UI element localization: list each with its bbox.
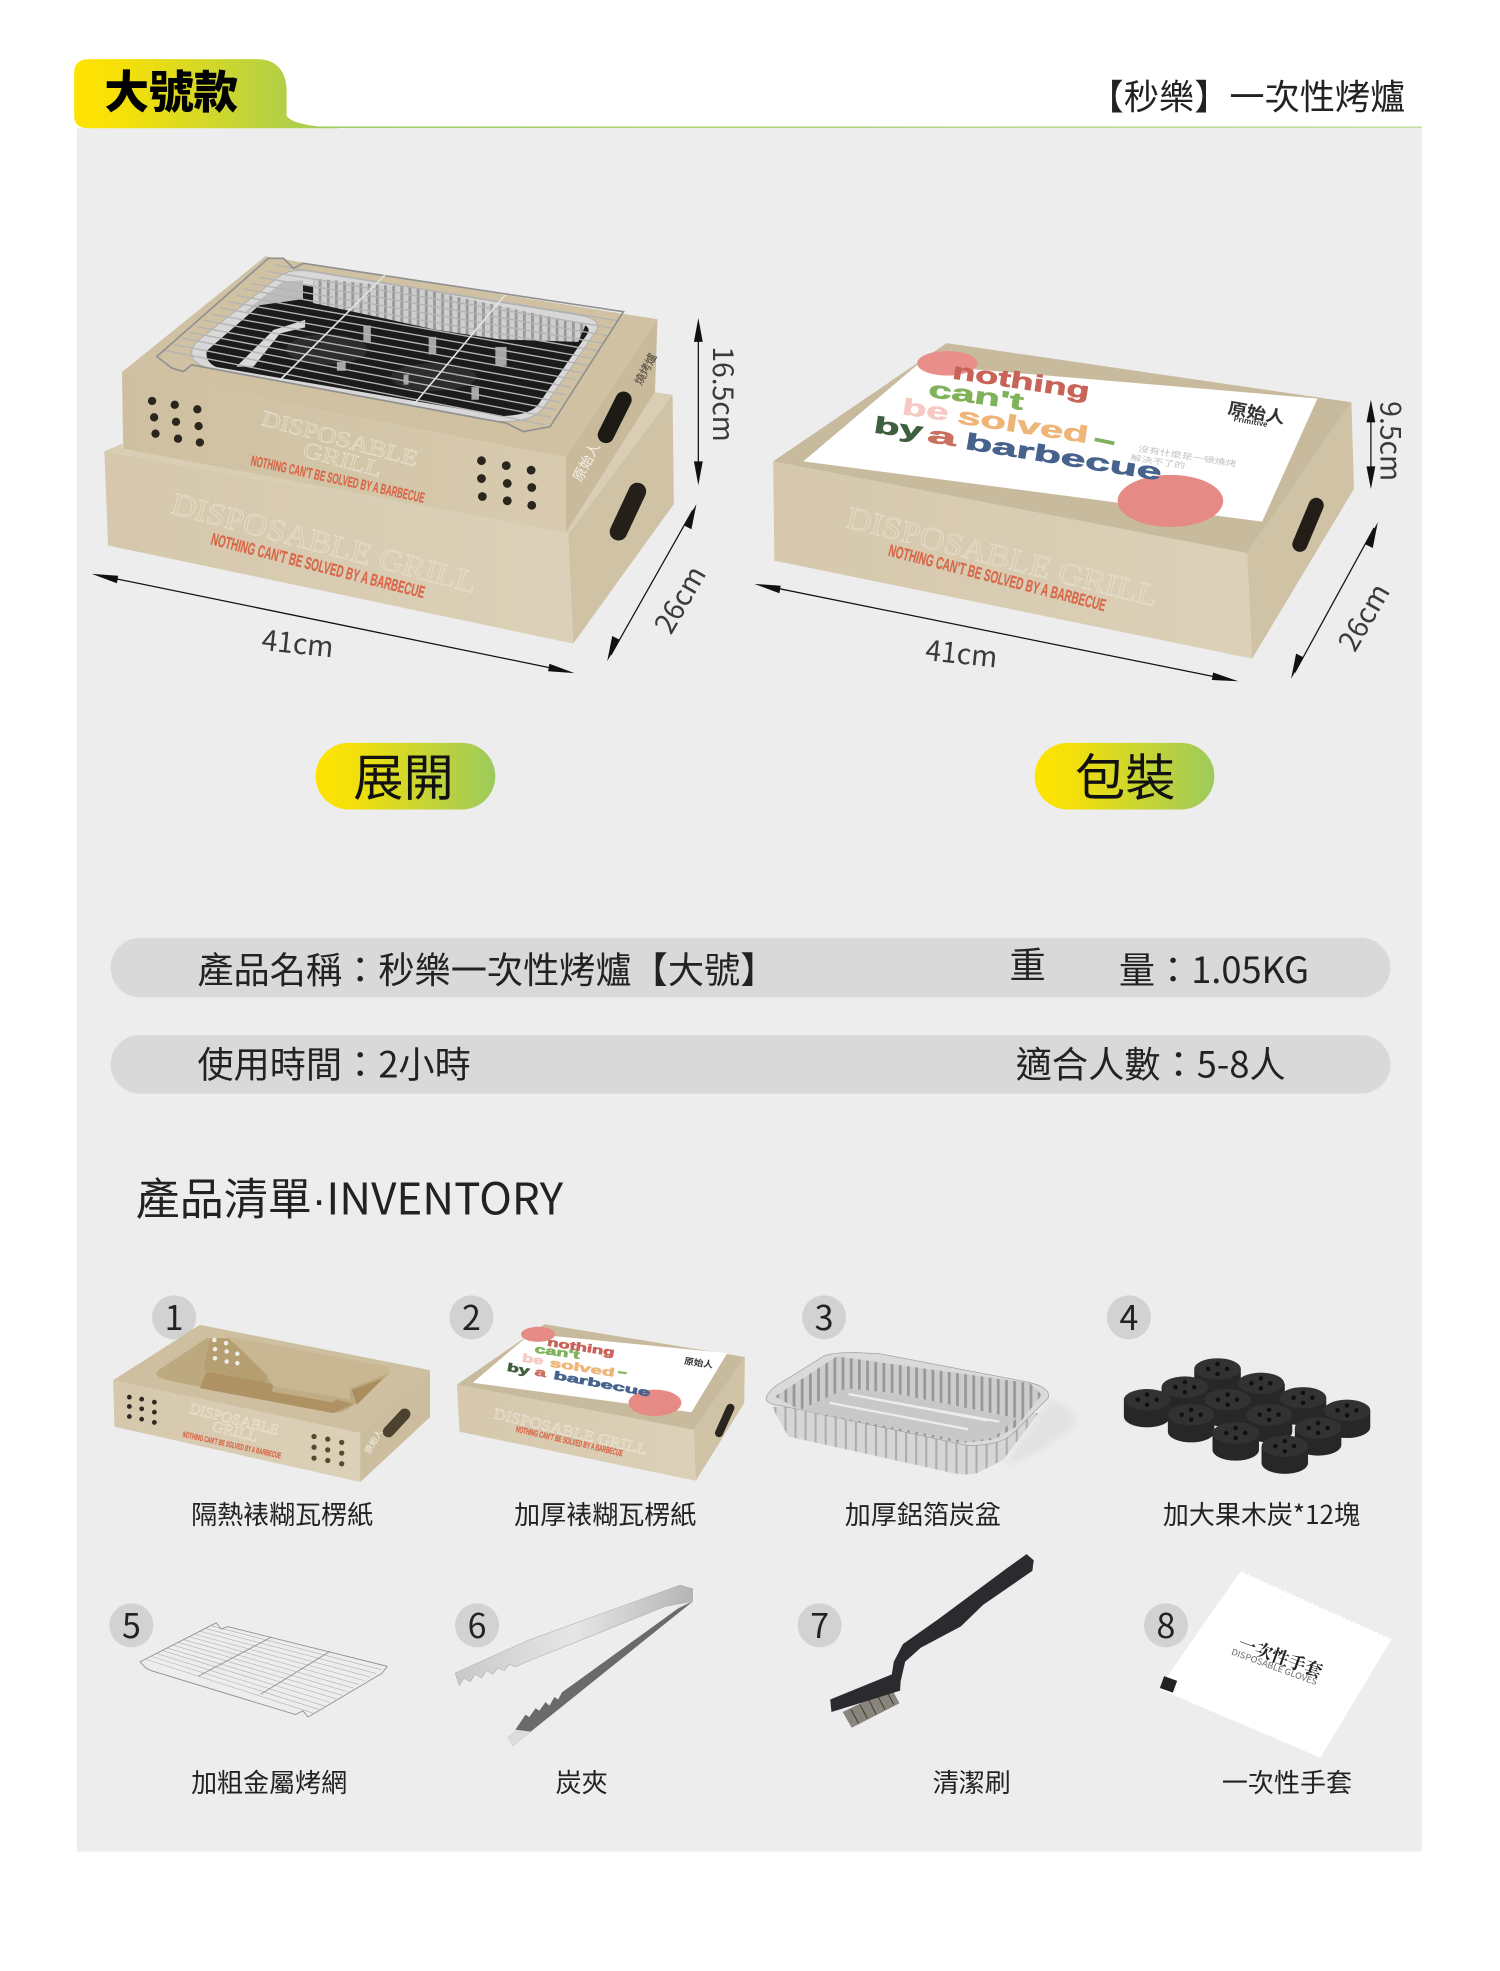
panel: grey background (77, 128, 1422, 1852)
arrow: depth 26cm: 26cm (1327, 575, 1399, 658)
white card: 原始人 (1226, 395, 1287, 429)
arrow: depth 26cm: 26cm (643, 557, 715, 640)
badge 2 (449, 1291, 493, 1340)
item 2: thickened corrugated box: be (521, 1352, 544, 1368)
header line (287, 126, 1422, 128)
item 2: thickened corrugated box: 原始人 (683, 1354, 714, 1371)
item 2: thickened corrugated box: by (506, 1362, 532, 1378)
product name heading: 【秒樂】一次性烤爐 (1089, 69, 1405, 120)
item 2: thickened corrugated box: solved (549, 1357, 616, 1380)
item 1: insulating corrugated box: DISPOSABLE (188, 1401, 281, 1439)
arrow: height 16.5cm: 16.5cm (704, 346, 745, 442)
item 4: fruitwood charcoal x12 (1107, 1291, 1370, 1532)
badge 6: 6 (468, 1599, 487, 1648)
item 8: disposable gloves packet: 一次性手套 (1235, 1630, 1326, 1684)
item 3: thick foil pan (766, 1291, 1075, 1532)
lower box (104, 392, 674, 644)
badge 3 (802, 1291, 846, 1340)
white card: barbecue (963, 428, 1164, 485)
label pill: 包裝: 包裝 (1075, 739, 1175, 811)
caption: 加厚裱糊瓦楞紙 (514, 1495, 696, 1532)
badge 8 (1144, 1599, 1188, 1648)
caption: 一次性手套 (1222, 1763, 1352, 1800)
badge 1 (152, 1291, 196, 1340)
white card: 解決不了的 (1130, 451, 1186, 471)
lower box: NOTHING CAN'T BE SOLVED BY A BARBECUE (209, 530, 427, 602)
item 8: disposable gloves packet: DISPOSABLE GLOVES (1230, 1646, 1319, 1688)
white card: solved (956, 402, 1090, 448)
item 2: thickened corrugated box (449, 1291, 745, 1532)
arrow: width 41cm (92, 574, 575, 673)
upper box: 燒烤爐 (631, 350, 661, 388)
title tab: 大號款 (74, 56, 339, 128)
arrow: width 41cm (754, 584, 1238, 681)
white card: by (872, 412, 925, 444)
item 1: insulating corrugated box (113, 1291, 430, 1532)
wire rack (157, 258, 623, 432)
product photo: unfolded grill (104, 256, 674, 644)
opening (156, 1336, 390, 1413)
white card: can't (927, 376, 1026, 415)
badge 7 (798, 1599, 842, 1648)
white card: Primitive (1233, 413, 1269, 430)
caption: 加粗金屬烤網 (191, 1763, 347, 1800)
item 2: thickened corrugated box: NOTHING CAN'T BE SOLVED BY A BARBECUE (515, 1424, 624, 1458)
spec bar: usage time and people: 使用時間：2小時 (197, 1036, 471, 1088)
arrow: depth 26cm (1291, 522, 1399, 679)
upper box: GRILL (300, 437, 385, 482)
item 8: disposable gloves packet (1144, 1571, 1392, 1800)
upper box: 原始人 (567, 438, 604, 485)
arrow: width 41cm: 41cm (260, 618, 336, 666)
badge 2: 2 (462, 1291, 481, 1340)
arrow: depth 26cm (607, 504, 715, 661)
item 1: insulating corrugated box: 原始人 (361, 1426, 385, 1456)
item 5: metal grill rack (109, 1599, 387, 1800)
spec bar: usage time and people (111, 1035, 1390, 1094)
product photo: packaged box (773, 343, 1354, 659)
item 1: insulating corrugated box: GRILL (210, 1419, 259, 1446)
item 7: cleaning brush (798, 1554, 1034, 1800)
caption: 加厚鋁箔炭盆 (845, 1495, 1001, 1532)
label pill: 展開: 展開 (353, 739, 454, 811)
upper box: DISPOSABLE (259, 406, 421, 471)
arrow: height 9.5cm: 9.5cm (1371, 401, 1412, 481)
badge 5: 5 (122, 1599, 141, 1648)
badge 7: 7 (810, 1599, 829, 1648)
white card: be (901, 393, 950, 426)
spec bar: product name and weight (111, 937, 1390, 997)
spec bar: product name and weight: 量：1.05KG (1119, 942, 1309, 994)
item 6: charcoal tongs (455, 1585, 693, 1800)
spec bar: product name and weight: 重 (1009, 937, 1046, 989)
badge 8: 8 (1157, 1599, 1175, 1648)
caption: 隔熱裱糊瓦楞紙 (191, 1495, 373, 1532)
title tab: 大號款: 大號款 (104, 56, 238, 121)
badge 6 (455, 1599, 499, 1648)
product photo: packaged box: NOTHING CAN'T BE SOLVED BY A BARBECUE (887, 541, 1108, 615)
foil pan and charcoal (192, 271, 598, 421)
product photo: packaged box: DISPOSABLE GRILL (843, 500, 1162, 614)
arrow: height 16.5cm (694, 318, 745, 485)
arrow: width 41cm: 41cm (924, 628, 1000, 676)
white card: a (926, 421, 961, 451)
caption: 清潔刷 (933, 1763, 1011, 1800)
label pill: 展開 (316, 739, 495, 811)
item 2: thickened corrugated box: DISPOSABLE GRILL (492, 1406, 648, 1458)
badge 4: 4 (1119, 1291, 1138, 1340)
item 1: insulating corrugated box: NOTHING CAN'T BE SOLVED BY A BARBECUE (182, 1430, 282, 1461)
item 2: thickened corrugated box: can't (534, 1344, 581, 1362)
white card (803, 351, 1317, 527)
badge 4 (1107, 1291, 1151, 1340)
badge 5 (109, 1599, 153, 1648)
label pill: 包裝 (1035, 739, 1214, 811)
badge 3: 3 (815, 1291, 833, 1340)
caption: 加大果木炭*12塊 (1163, 1495, 1360, 1532)
section heading: inventory: 產品清單·INVENTORY (136, 1163, 564, 1227)
item 2: thickened corrugated box: nothing (546, 1337, 615, 1359)
white card: 沒有什麼是一頓燒烤 (1137, 442, 1238, 469)
upper box (122, 256, 661, 533)
white card: nothing (951, 358, 1092, 404)
spec bar: product name and weight: 產品名稱：秒樂一次性烤爐【大號】 (197, 942, 776, 994)
spec bar: usage time and people: 適合人數：5-8人 (1016, 1036, 1286, 1088)
upper box: NOTHING CAN'T BE SOLVED BY A BARBECUE (249, 453, 426, 507)
item 2: thickened corrugated box: barbecue (553, 1370, 651, 1400)
badge 1: 1 (165, 1291, 184, 1340)
caption: 炭夾 (556, 1763, 608, 1800)
item 2: thickened corrugated box: a (534, 1366, 548, 1380)
lower box: DISPOSABLE GRILL (168, 486, 481, 600)
